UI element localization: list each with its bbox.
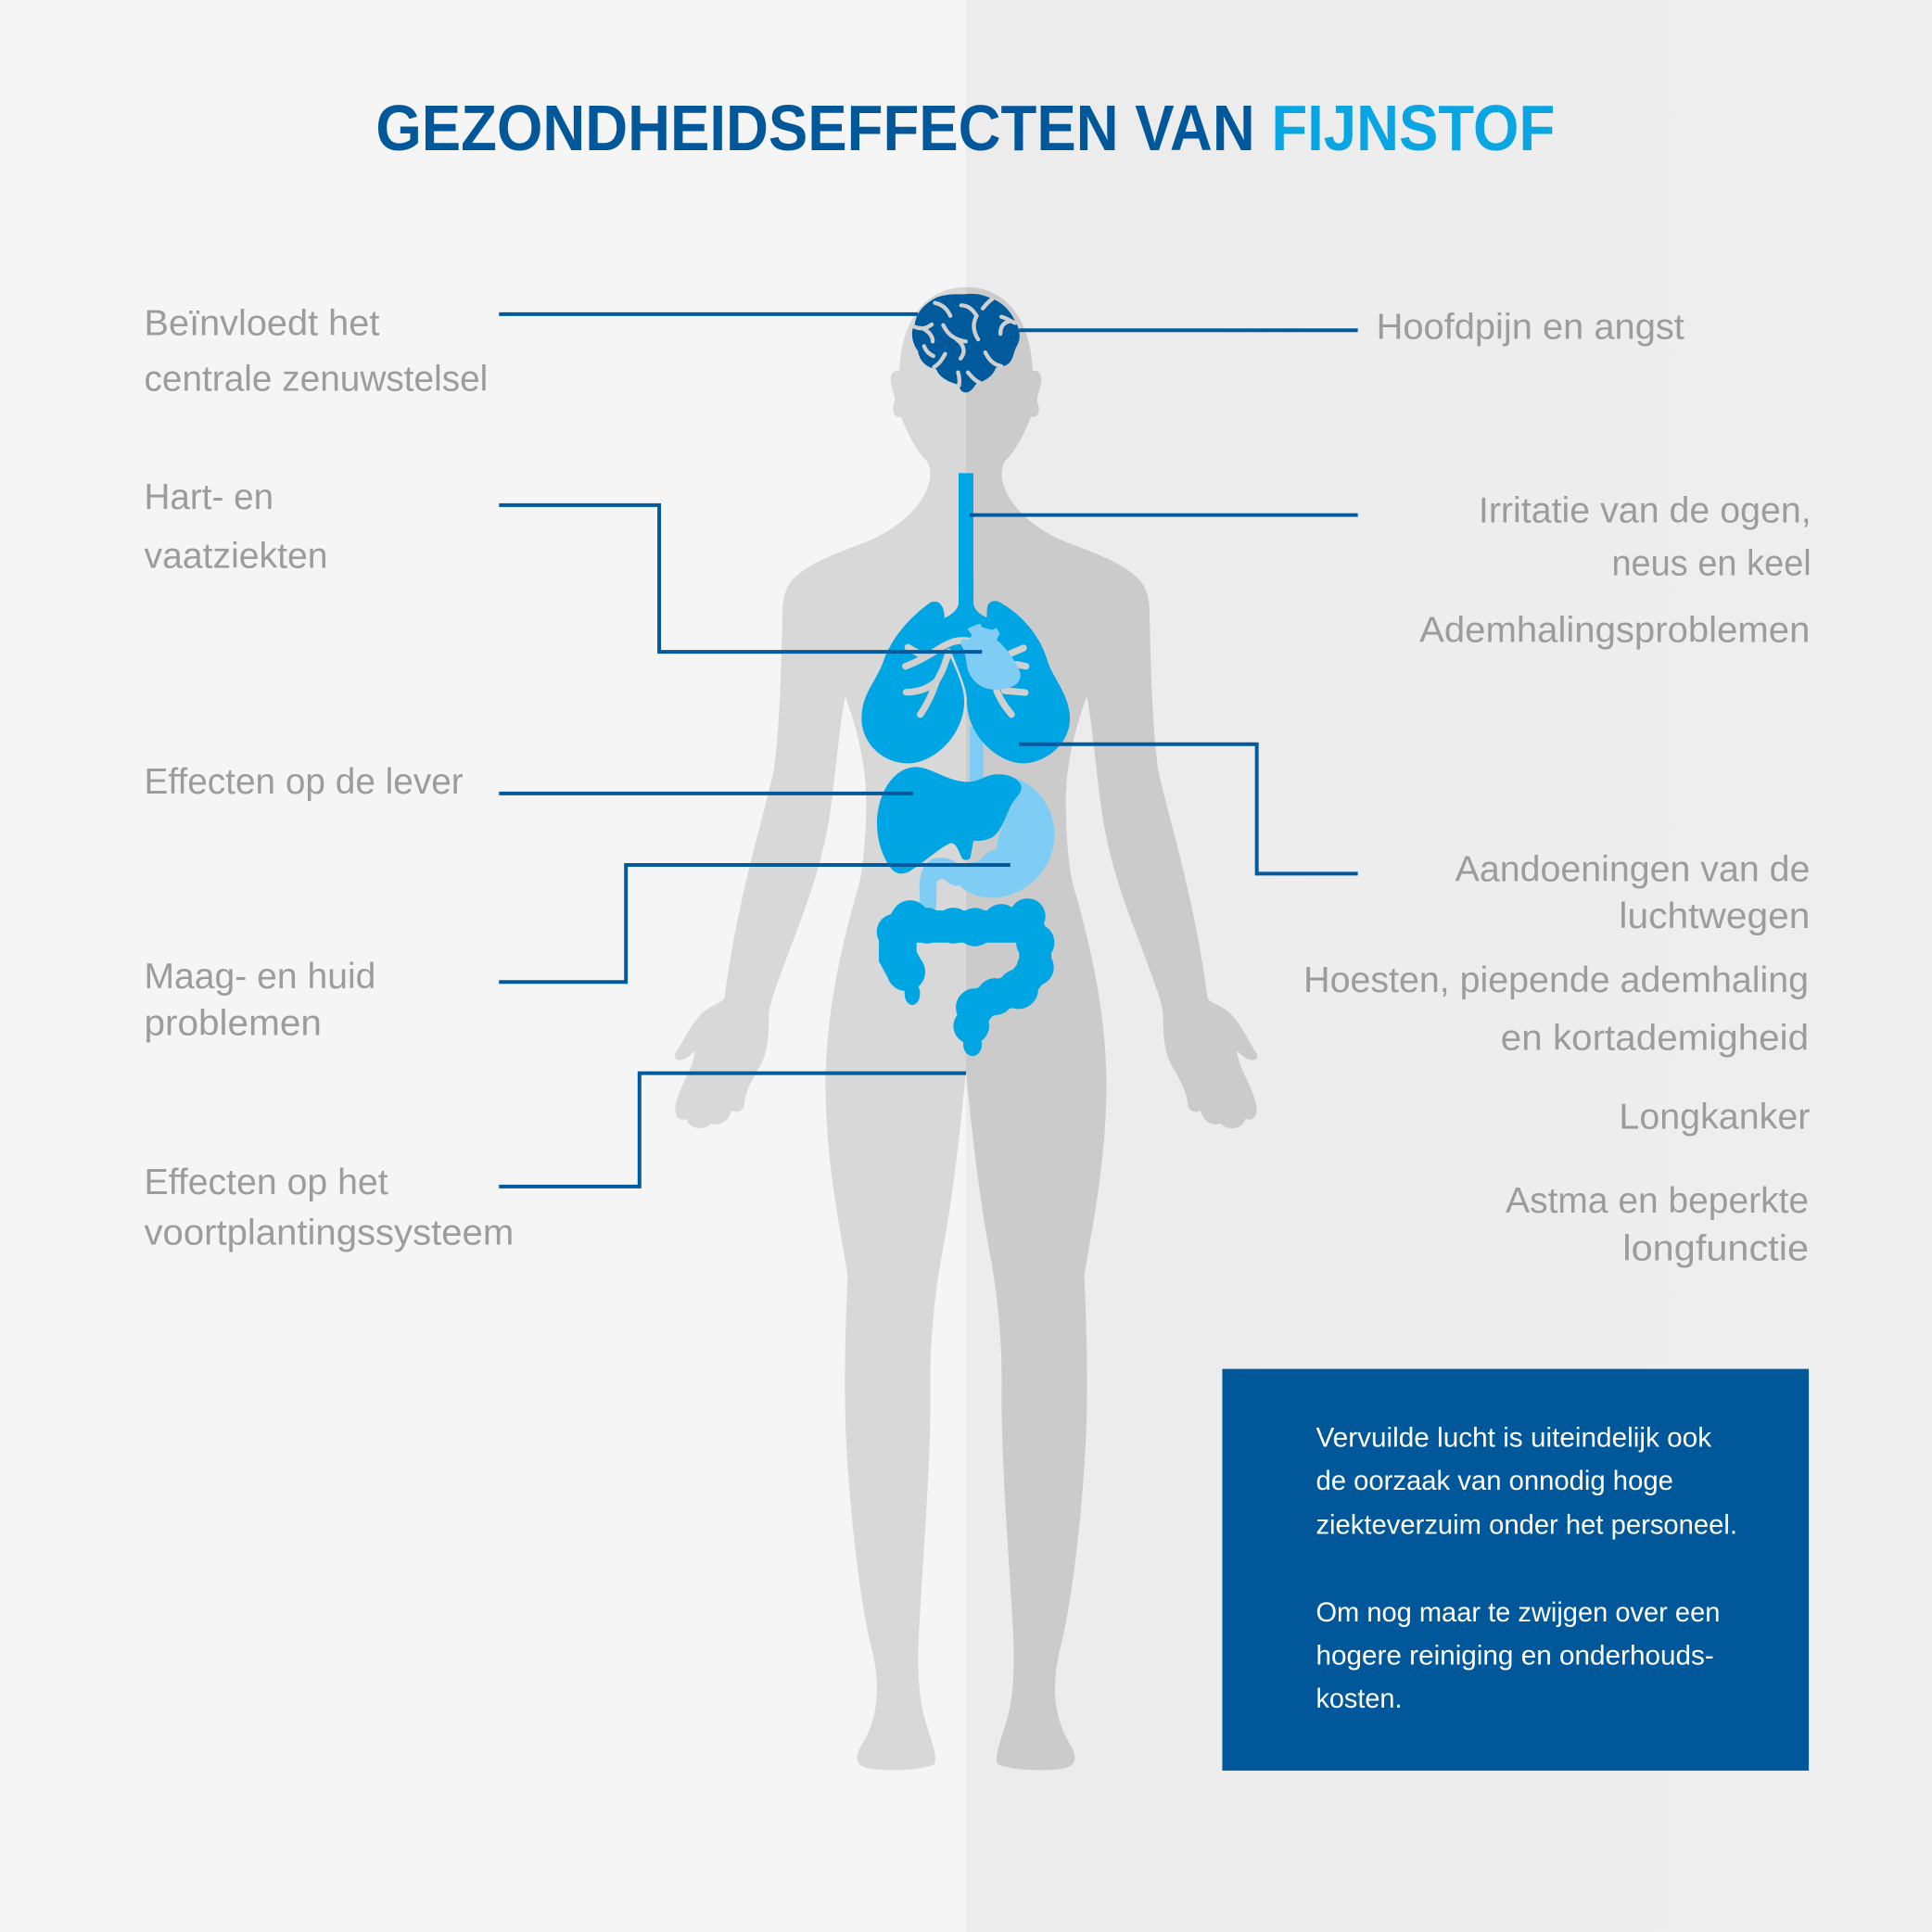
- callout box: ziekteverzuim onder het personeel.: [1316, 1511, 1737, 1541]
- lungs: [861, 575, 1070, 763]
- right labels: Hoesten, piepende ademhaling: [1303, 960, 1809, 1000]
- icon: digestive organs: [877, 767, 1054, 1056]
- left labels: voortplantingssysteem: [145, 1213, 514, 1252]
- callout box: Om nog maar te zwijgen over een: [1316, 1598, 1720, 1628]
- right labels: longfunctie: [1622, 1229, 1809, 1269]
- icon: brain: [912, 294, 1020, 392]
- right labels: Astma en beperkte: [1506, 1181, 1809, 1221]
- left labels: Maag- en huid: [145, 957, 375, 997]
- right labels: luchtwegen: [1619, 896, 1810, 936]
- icon: esophagus: [970, 727, 984, 801]
- title: GEZONDHEIDSEFFECTEN VAN FIJNSTOF: [375, 92, 1555, 164]
- left labels: vaatziekten: [145, 537, 328, 577]
- right labels: en kortademigheid: [1501, 1018, 1809, 1058]
- left labels: [145, 304, 514, 1252]
- stomach: [920, 774, 1054, 909]
- right labels: Aandoeningen van de: [1455, 849, 1810, 889]
- left labels: Effecten op de lever: [145, 762, 464, 802]
- icon: trachea: [959, 473, 973, 584]
- right labels: Hoofdpijn en angst: [1377, 307, 1684, 347]
- intestines: [877, 898, 1054, 1056]
- left labels: Effecten op het: [145, 1163, 388, 1202]
- left labels: problemen: [145, 1003, 322, 1043]
- liver: [877, 767, 1022, 873]
- callout box: Vervuilde lucht is uiteindelijk ook: [1316, 1423, 1711, 1453]
- left labels: centrale zenuwstelsel: [145, 359, 488, 399]
- right labels: Longkanker: [1619, 1097, 1811, 1137]
- right labels: neus en keel: [1611, 544, 1811, 584]
- callout box: hogere reiniging en onderhouds-: [1316, 1642, 1714, 1671]
- right labels: Irritatie van de ogen,: [1479, 491, 1811, 531]
- icon: lungs and heart: [861, 575, 1070, 763]
- heart: [960, 624, 1021, 690]
- callout box: kosten.: [1316, 1684, 1402, 1714]
- human body silhouette: [675, 287, 1257, 1770]
- bronchi: [906, 641, 1026, 715]
- left labels: Beïnvloedt het: [145, 304, 380, 344]
- left labels: Hart- en: [145, 477, 273, 517]
- connector lines: [499, 314, 1358, 1187]
- callout box: de oorzaak van onnodig hoge: [1316, 1467, 1673, 1496]
- right labels: [1303, 307, 1811, 1269]
- right labels: Ademhalingsproblemen: [1419, 610, 1810, 650]
- callout box: [1222, 1369, 1809, 1771]
